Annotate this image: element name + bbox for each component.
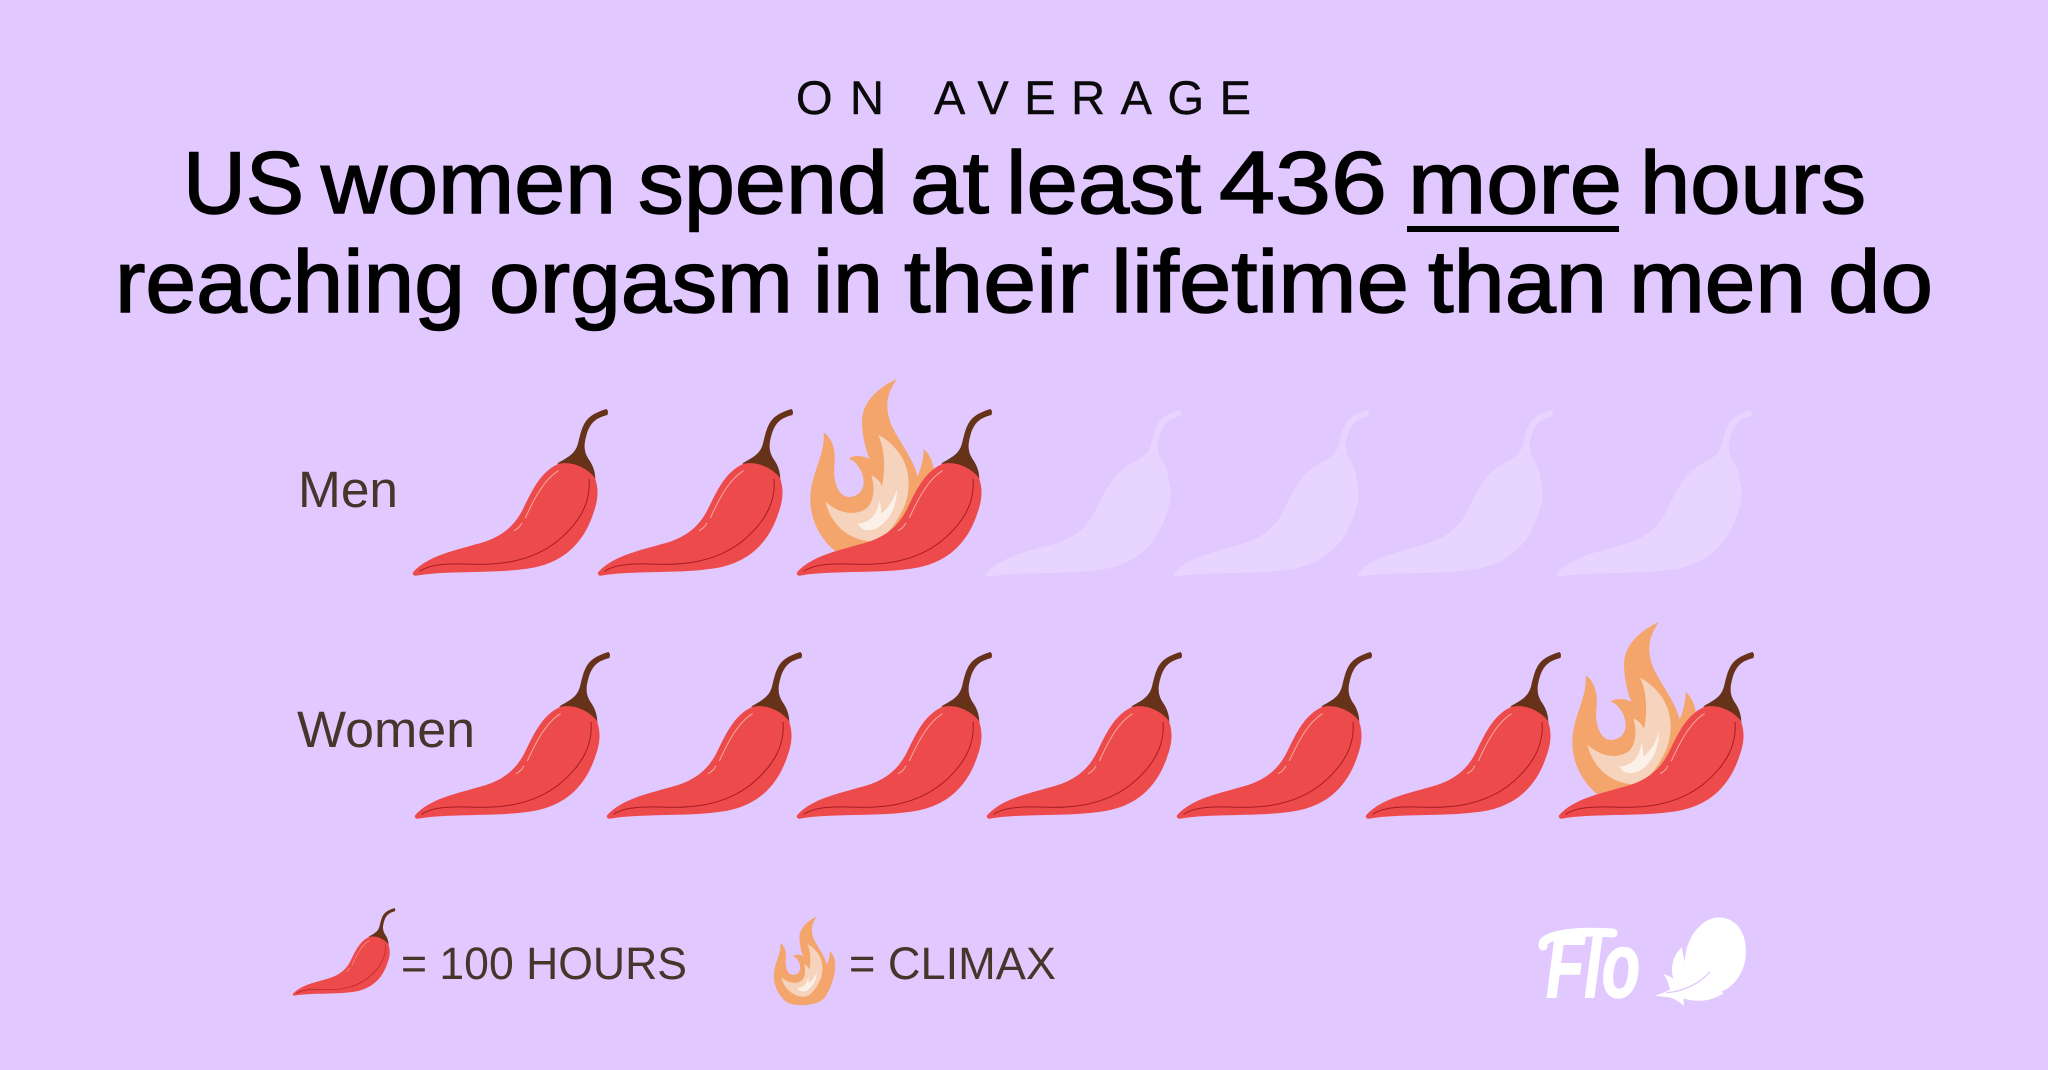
flame: women climax xyxy=(1572,622,1696,801)
icon: legend flame xyxy=(774,917,835,1005)
title line 1: more xyxy=(1408,133,1622,232)
faded chili: men 6 xyxy=(1358,410,1553,577)
chili: women 2 xyxy=(607,652,802,819)
row label: women: Women xyxy=(297,701,475,758)
eyebrow: on average: ON xyxy=(796,71,884,124)
row label: men: Men xyxy=(298,461,398,518)
title line 2: lifetime xyxy=(1111,232,1409,331)
title line 2: than xyxy=(1428,232,1607,331)
legend text: climax: = CLIMAX xyxy=(849,938,1056,989)
title line 2: in xyxy=(813,232,883,331)
title line 2: men xyxy=(1629,232,1806,331)
flame: men climax xyxy=(810,379,934,558)
legend text: 100 hours: = 100 HOURS xyxy=(401,938,687,989)
faded chili: men 7 xyxy=(1557,410,1752,577)
faded chili: men 5 xyxy=(1174,410,1369,577)
title line 1: at xyxy=(910,133,989,232)
title line 1: US xyxy=(183,133,304,232)
title line 2: their xyxy=(904,232,1089,331)
title line 1: least xyxy=(1006,133,1201,232)
logo: Flo xyxy=(1543,915,1746,1017)
legend: climax xyxy=(774,917,1056,1005)
chili: men 3 xyxy=(797,409,992,576)
underline on more xyxy=(1407,226,1619,232)
title line 2: orgasm xyxy=(489,232,793,331)
legend: 100 hours xyxy=(293,908,687,996)
title line 2: do xyxy=(1828,232,1933,331)
chili: women 1 xyxy=(415,652,610,819)
chili: women 6 xyxy=(1366,652,1561,819)
faded chili: men 4 xyxy=(986,410,1181,577)
eyebrow: on average: AVERAGE xyxy=(934,71,1251,124)
chili: women 4 xyxy=(987,652,1182,819)
chili: women 3 xyxy=(797,652,992,819)
chili: men 1 xyxy=(413,409,608,576)
icon: feather xyxy=(1655,917,1746,1006)
icon: legend chili xyxy=(293,908,395,996)
logo swash on F xyxy=(1543,932,1613,946)
title line 1: hours xyxy=(1640,133,1866,232)
title line 1: 436 xyxy=(1219,133,1387,232)
row: men chilies xyxy=(413,379,1752,577)
chili: men 2 xyxy=(598,409,793,576)
title line 2: reaching xyxy=(115,232,465,331)
title line 1: women xyxy=(320,133,616,232)
logo wordmark: Flo xyxy=(1546,915,1640,1017)
chili: women 5 xyxy=(1177,652,1372,819)
title xyxy=(115,133,1933,331)
row: women chilies xyxy=(415,622,1754,819)
title line 1: spend xyxy=(638,133,888,232)
chili: women 7 xyxy=(1559,652,1754,819)
